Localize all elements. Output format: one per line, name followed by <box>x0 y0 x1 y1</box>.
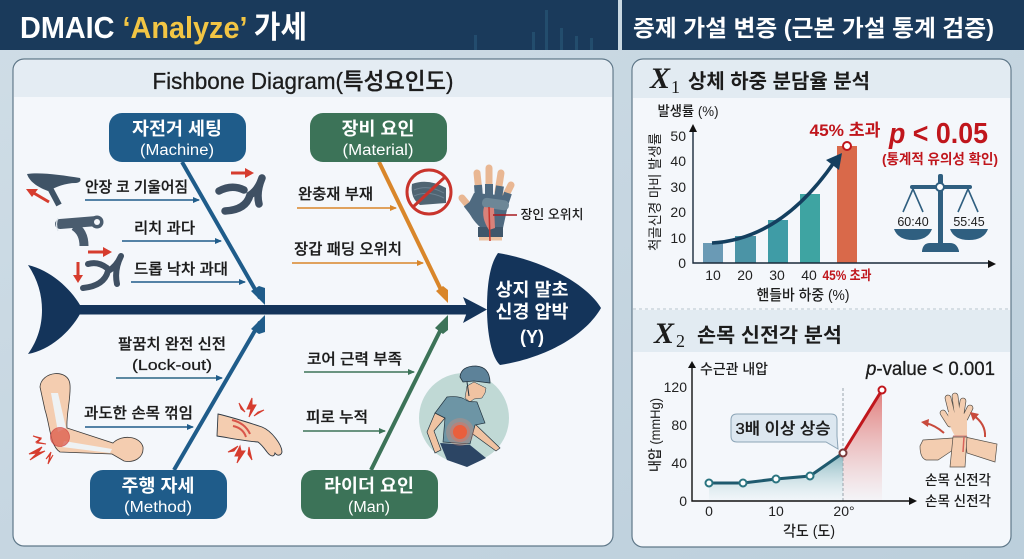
category: method: 주행 자세 <box>122 476 194 496</box>
fish tail <box>28 265 80 354</box>
fish head: effect Y: 상지 말초 <box>496 280 568 300</box>
heading: X1 load analysis: 상체 하중 분담율 분석 <box>688 70 870 93</box>
fish head: effect Y: (Y) <box>520 327 544 347</box>
category: material: 장비 요인 <box>342 119 414 139</box>
title: DMAIC Analyze: DMAIC ‘Analyze’ 가세 <box>20 10 307 45</box>
chart: X1 bar chart: 45% 초과 <box>810 121 881 140</box>
icon: balance scale: 55:45 <box>953 215 985 229</box>
cause: drop: 드롭 낙차 과대 <box>134 261 228 278</box>
cause: fatigue <box>303 409 385 431</box>
cause: lock-out <box>116 336 226 378</box>
label: wrist extension angle: 손목 신전각 <box>925 493 991 509</box>
cause: fatigue: 피로 누적 <box>306 409 368 426</box>
category: man: (Man) <box>348 499 390 516</box>
callout: more than threefold rise <box>731 414 838 449</box>
chart: X2 line chart: 80 <box>671 417 687 433</box>
chart: X2 line chart: 수근관 내압 <box>700 361 768 377</box>
heading: X2 wrist analysis: 손목 신전각 분석 <box>697 324 842 347</box>
category: machine: (Machine) <box>140 142 214 159</box>
icon: arm with elbow pain <box>29 374 143 464</box>
category: man: 라이더 요인 <box>324 476 414 496</box>
label: wrist extension angle: 손목 신전각 <box>925 472 991 488</box>
panel: hypothesis verification <box>632 59 1011 547</box>
stat: p less than 0.05 <box>882 118 998 167</box>
cause: wrist bending: 과도한 손목 꺾임 <box>84 405 193 422</box>
bone: material <box>379 162 444 296</box>
bone: man <box>371 323 444 470</box>
heading: X1 load analysis <box>649 62 870 97</box>
label: wrist extension angle <box>925 472 991 509</box>
bars <box>703 146 857 263</box>
bone: machine <box>182 162 260 298</box>
chart: X1 bar chart: 40 <box>801 267 817 283</box>
bone arrowheads <box>251 286 448 334</box>
heading: X2 wrist analysis: 2 <box>676 331 685 351</box>
category: machine: 자전거 세팅 <box>132 119 222 139</box>
cause: drop <box>131 261 245 282</box>
icon: handlebar with arrow <box>219 168 262 211</box>
panel: fishbone diagram <box>13 59 613 546</box>
callout: more than threefold rise: 3배 이상 상승 <box>736 420 830 438</box>
chart: X2 line chart <box>647 361 917 540</box>
category: man <box>301 470 438 519</box>
fish head: effect Y: 신경 압박 <box>496 302 569 322</box>
icon: wrist with pain <box>217 398 282 463</box>
cause: glove padding <box>292 241 423 263</box>
category: method <box>90 470 227 519</box>
growth curve arrow <box>712 153 842 243</box>
cause: saddle nose tilt: 안장 코 기울어짐 <box>85 179 188 196</box>
chart: X2 line chart: 각도 (도) <box>783 523 835 540</box>
chart: X1 bar chart: 50 <box>670 128 686 144</box>
stat: p less than 0.05: p < 0.05 <box>888 118 988 150</box>
icon: cycling glove <box>462 168 584 241</box>
chart: X1 bar chart: 30 <box>769 267 785 283</box>
icon: balance scale: 60:40 <box>897 215 929 229</box>
spine arrow <box>78 297 487 323</box>
cause: lock-out: 팔꿈치 완전 신전 <box>118 336 226 353</box>
heading: fishbone diagram: Fishbone Diagram(특성요인도) <box>152 68 454 94</box>
bone: method <box>174 322 260 470</box>
heading: X2 wrist analysis: X <box>653 317 675 350</box>
cause: no cushioning <box>297 186 396 208</box>
line series <box>706 386 886 486</box>
heading: X1 load analysis: 1 <box>671 77 680 97</box>
chart: X1 bar chart: 척골신경 마비 발생률 <box>647 133 663 251</box>
chart: X1 bar chart: 10 <box>670 230 686 246</box>
icon: drop handlebar with arrows <box>73 247 121 288</box>
header: left title bar <box>0 0 618 50</box>
header: right title bar <box>622 0 1024 50</box>
category: machine <box>109 113 246 162</box>
cause: reach <box>122 220 221 241</box>
icon: no cushioning sign <box>407 170 451 214</box>
cause: lock-out: (Lock-out) <box>132 357 212 374</box>
cause: core strength: 코어 근력 부족 <box>307 351 402 368</box>
icon: balance scale <box>894 174 988 252</box>
icon: saddle <box>26 173 80 205</box>
heading: X1 load analysis: X <box>649 62 671 95</box>
category: material: (Material) <box>342 142 414 159</box>
chart: X1 bar chart <box>647 103 996 304</box>
cause: no cushioning: 완충재 부재 <box>298 186 373 203</box>
category: method: (Method) <box>124 499 192 516</box>
stat: p less than 0.05: (통계적 유의성 확인) <box>882 151 998 167</box>
chart: X1 bar chart: 20 <box>737 267 753 283</box>
stat: p-value less than 0.001: p-value < 0.001 <box>865 359 995 380</box>
chart: X1 bar chart: 20 <box>670 204 686 220</box>
chart: X2 line chart: 0 <box>705 503 713 519</box>
category: material <box>310 113 447 162</box>
cause: reach: 리치 과다 <box>134 220 195 237</box>
chart: X2 line chart: 10 <box>768 503 784 519</box>
chart: X2 line chart: 120 <box>664 379 687 395</box>
chart: X2 line chart: 내압 (mmHg) <box>647 398 663 472</box>
chart: X1 bar chart: 발생률 (%) <box>658 103 718 119</box>
fish head: effect Y <box>487 253 601 365</box>
chart: X1 bar chart: 30 <box>670 179 686 195</box>
chart: X2 line chart: 20° <box>833 503 855 519</box>
chart: X1 bar chart: 45% 초과 <box>822 268 872 283</box>
chart: X1 bar chart: 핸들바 하중 (%) <box>756 287 850 304</box>
icon: stem <box>56 216 104 246</box>
heading: X2 wrist analysis <box>653 317 842 351</box>
chart: X2 line chart: 0 <box>679 493 687 509</box>
title: hypothesis verification: 증제 가설 변증 (근본 가설 통계 검증) <box>633 15 994 41</box>
chart: X1 bar chart: 10 <box>705 267 721 283</box>
cause: core strength <box>304 351 414 372</box>
chart: X1 bar chart: 40 <box>670 153 686 169</box>
cause: glove padding: 장갑 패딩 오위치 <box>294 241 402 258</box>
label: palm mispositioned: 장인 오위치 <box>520 207 584 222</box>
chart: X1 bar chart: 0 <box>678 255 686 271</box>
icon: rider with back pain <box>419 366 509 467</box>
chart: X2 line chart: 40 <box>671 455 687 471</box>
icon: wrist extension <box>920 396 997 467</box>
